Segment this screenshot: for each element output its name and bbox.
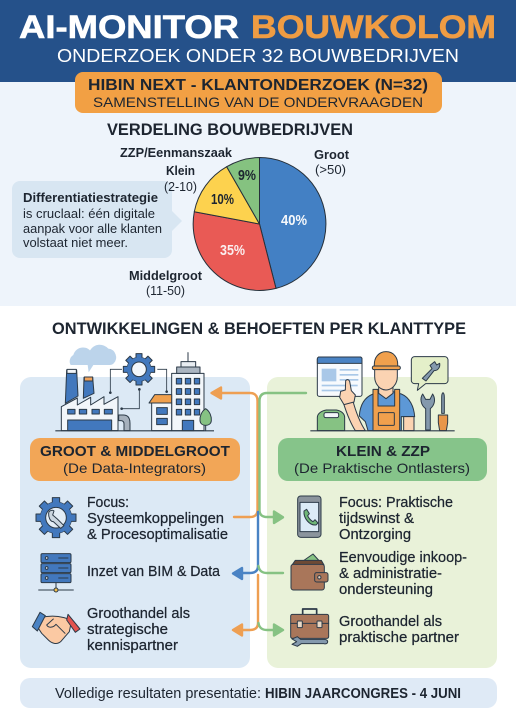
pie labels: Middelgroot <box>129 268 203 283</box>
footer banner: Volledige resultaten presentatie: <box>55 686 261 702</box>
arrow: orange bottom <box>233 575 258 636</box>
pie percentages: 40% <box>281 213 307 229</box>
subtitle: ONDERZOEK ONDER 32 BOUWBEDRIJVEN <box>57 46 459 66</box>
left items text: Systeemkoppelingen <box>87 510 224 527</box>
pie labels: Groot <box>314 147 350 162</box>
icon: worker illustration <box>310 352 455 431</box>
left items text: kennispartner <box>87 637 178 654</box>
arrow: green head right <box>274 512 283 523</box>
callout: Differentiatiestrategie <box>23 190 158 205</box>
pie chart <box>193 158 326 290</box>
right items text <box>339 494 467 646</box>
right items text: Eenvoudige inkoop- <box>339 549 467 566</box>
right items text: Focus: Praktische <box>339 494 453 511</box>
slice: klein 10% <box>194 167 260 224</box>
right items text: & administratie- <box>339 565 442 582</box>
icon: gear with wrench <box>36 498 76 538</box>
connector arrows <box>212 388 306 636</box>
pie labels: (11-50) <box>146 283 185 298</box>
right items text: Ontzorging <box>339 526 411 543</box>
icon: handshake <box>32 612 80 643</box>
left items text: Focus: <box>87 494 129 511</box>
icon: toolbox <box>291 609 329 646</box>
left items text: Inzet van BIM & Data <box>87 563 221 580</box>
header: klein en zzp: (De Praktische Ontlasters) <box>294 460 470 476</box>
orange banner <box>75 72 442 113</box>
pie labels: (>50) <box>315 162 346 177</box>
arrow: green middle <box>258 566 283 573</box>
footer banner <box>20 678 497 708</box>
left items text: Groothandel als <box>87 605 190 622</box>
heading: ontwikkelingen: ONTWIKKELINGEN & BEHOEFTEN PER KLANTTYPE <box>52 319 466 338</box>
slice: groot 40% <box>260 158 326 288</box>
pie percentages <box>211 168 307 259</box>
icon: phone <box>298 496 321 537</box>
orange banner: SAMENSTELLING VAN DE ONDERVRAAGDEN <box>93 94 423 110</box>
panel: light chart background <box>0 82 516 306</box>
header: klein en zzp: KLEIN & ZZP <box>336 443 430 460</box>
title: AI-MONITOR <box>19 9 239 45</box>
left items text: strategische <box>87 621 168 638</box>
header band <box>0 0 516 82</box>
header: klein en zzp <box>278 438 487 481</box>
header: groot en middelgroot <box>30 438 240 481</box>
right items text: ondersteuning <box>339 581 433 598</box>
right items text: tijdswinst & <box>339 510 414 527</box>
callout <box>12 181 182 258</box>
slice: zzp 9% <box>227 158 260 224</box>
orange banner: HIBIN NEXT - KLANTONDERZOEK (N=32) <box>88 77 428 94</box>
left items text <box>87 494 228 654</box>
header: groot en middelgroot: GROOT & MIDDELGROOT <box>40 443 230 460</box>
arrow: blue <box>233 512 258 579</box>
panel: groot en middelgroot <box>20 377 250 668</box>
callout: is cruclaal: één digitale <box>23 206 155 221</box>
callout: aanpak voor alle klanten <box>23 221 162 236</box>
pie percentages: 9% <box>238 168 256 184</box>
arrow: orange top <box>212 388 258 517</box>
title: BOUWKOLOM <box>251 9 496 45</box>
pie labels: ZZP/Eenmanszaak <box>120 145 233 160</box>
title <box>19 9 496 45</box>
footer banner: HIBIN JAARCONGRES - 4 JUNI <box>265 686 461 702</box>
pie percentages: 35% <box>220 243 245 259</box>
icon: wallet <box>291 554 328 590</box>
pie labels: Klein <box>166 163 195 178</box>
header: groot en middelgroot: (De Data-Integrators) <box>63 460 206 476</box>
icon: server <box>39 554 73 592</box>
panel: klein en zzp <box>267 377 497 668</box>
left items text: & Procesoptimalisatie <box>87 526 228 543</box>
arrow: green top <box>260 393 306 517</box>
slice: middelgroot 35% <box>193 212 276 290</box>
pie labels: (2-10) <box>164 179 197 194</box>
icon: industry illustration <box>55 345 214 431</box>
right items text: praktische partner <box>339 629 459 646</box>
heading: verdeling: VERDELING BOUWBEDRIJVEN <box>107 120 353 139</box>
right items text: Groothandel als <box>339 613 442 630</box>
callout: volstaat niet meer. <box>23 235 128 250</box>
arrow: green bottom <box>258 623 283 636</box>
pie labels <box>120 145 350 298</box>
pie percentages: 10% <box>211 192 234 208</box>
